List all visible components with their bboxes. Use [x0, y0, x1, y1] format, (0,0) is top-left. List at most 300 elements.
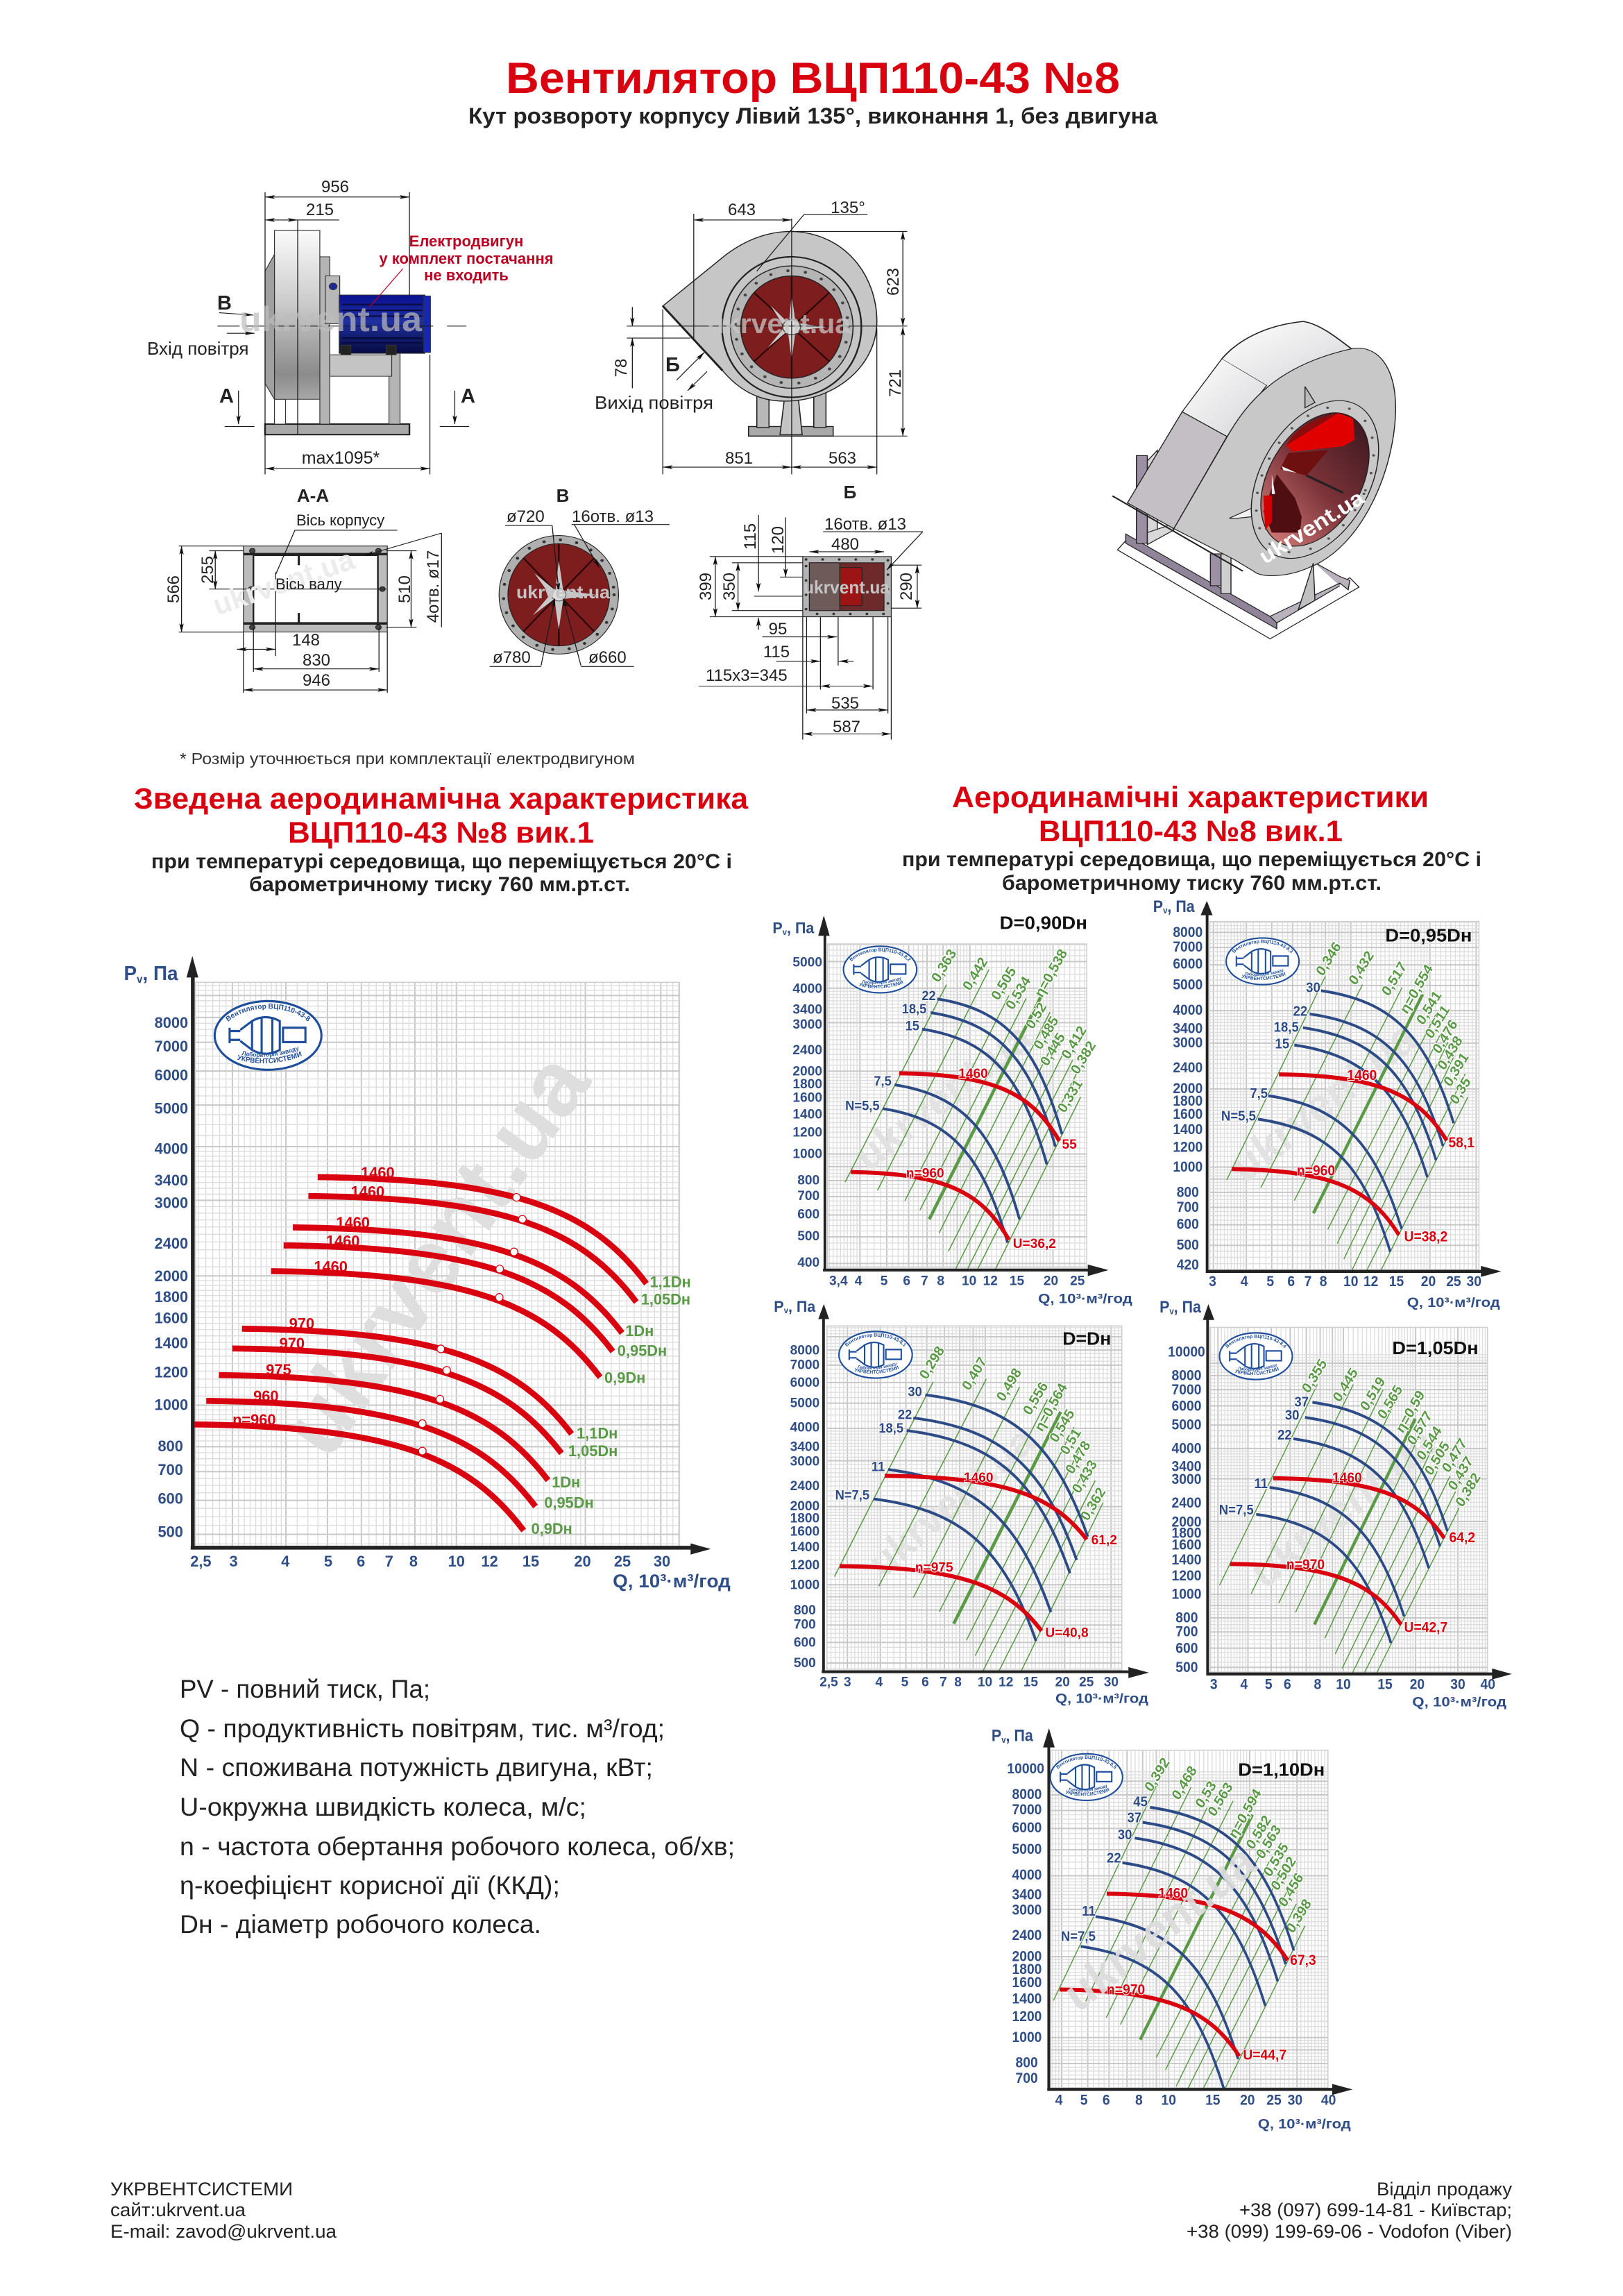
power curves	[1080, 1807, 1294, 2088]
power curves	[883, 999, 1062, 1242]
X axis labels: 15	[1010, 1273, 1024, 1289]
curve labels: 30	[1306, 980, 1320, 996]
efficiency labels: 0,534	[1003, 974, 1035, 1013]
efficiency labels: 0,52	[1023, 1000, 1050, 1032]
dimension text: section A-A: 148	[292, 631, 320, 650]
technical drawing: side view	[147, 178, 554, 474]
Y axis labels: 8000	[155, 1014, 188, 1031]
dimension text: front view: Б	[665, 354, 680, 376]
X axis labels: 4	[281, 1553, 290, 1570]
Y axis labels: 1400	[1172, 1552, 1201, 1568]
X axis labels: 2,5	[190, 1553, 212, 1570]
Y axis labels	[1007, 1761, 1044, 2086]
X axis labels: 25	[1446, 1274, 1461, 1290]
efficiency labels: 0,476	[1430, 1017, 1461, 1056]
power curves	[1258, 990, 1454, 1251]
stamp: Вентилятор ВЦП110-43-8,3	[1232, 940, 1293, 954]
efficiency labels: 0,346	[1314, 939, 1344, 979]
power curves	[1256, 1402, 1447, 1643]
Y axis labels: 1000	[1012, 2029, 1042, 2045]
watermark: ukrvent.ua	[1222, 1009, 1425, 1193]
speed labels: 1460	[326, 1232, 359, 1250]
Y axis labels	[790, 1342, 819, 1671]
X axis labels: 7	[1305, 1274, 1311, 1290]
watermark: ukrvent.ua	[239, 300, 423, 339]
axis titles: v	[137, 974, 143, 986]
efficiency labels: 0,445	[1330, 1365, 1361, 1405]
Y axis labels: 1600	[1012, 1975, 1042, 1991]
axis titles: P	[774, 1298, 784, 1315]
efficiency labels: 0,298	[917, 1344, 948, 1382]
X axis labels: 30	[1467, 1274, 1481, 1290]
Y axis labels	[792, 954, 822, 1270]
X axis labels: 2,5	[819, 1674, 838, 1690]
stamp	[1225, 937, 1300, 986]
Y axis labels: 3400	[1012, 1887, 1042, 1903]
Y axis labels: 1800	[1173, 1093, 1203, 1109]
Y axis labels: 5000	[1172, 1417, 1201, 1433]
axis titles: P	[992, 1727, 1001, 1745]
dimension text: side view: А	[461, 385, 475, 407]
Y axis labels: 6000	[1012, 1820, 1042, 1836]
icon: inlet wheel	[499, 536, 618, 654]
curve labels: 22	[921, 988, 936, 1003]
speed labels: 58,1	[1448, 1135, 1475, 1151]
Y axis labels: 2000	[1172, 1514, 1201, 1530]
subtitle: Кут розвороту корпусу Лівий 135°, виконання 1, без двигуна	[468, 103, 1157, 128]
stamp: Вентилятор ВЦП110-43-8,4	[1225, 1334, 1286, 1348]
axis titles: Q, 10³·м³/год	[613, 1571, 731, 1592]
diameter labels	[532, 1273, 691, 1537]
efficiency labels: 0,511	[1422, 1002, 1453, 1042]
curve labels	[845, 988, 936, 1113]
dimension text: side view: Вхід повітря	[147, 338, 249, 359]
X axis labels: 20	[1055, 1674, 1070, 1690]
legend: N - споживана потужність двигуна, кВт;	[180, 1753, 653, 1782]
axis titles	[992, 1727, 1351, 2132]
efficiency labels: 0,382	[1453, 1470, 1484, 1510]
efficiency labels: 0,362	[1078, 1485, 1109, 1523]
speed labels: 1460	[361, 1164, 395, 1181]
heading: characteristics	[902, 781, 1481, 895]
stamp: УКРВЕНТСИСТЕМИ	[237, 1051, 302, 1063]
Y axis labels: 8000	[1173, 925, 1203, 940]
dimension text: view Б: 480	[831, 535, 859, 554]
Y axis labels: 1000	[792, 1146, 822, 1162]
stamp: Лабораторія заводу	[1238, 1363, 1277, 1371]
dimension text: view Б: 587	[833, 718, 860, 736]
axis titles: , Па	[142, 963, 178, 984]
Y axis labels: 10000	[1168, 1344, 1205, 1360]
Y axis labels: 6000	[1173, 956, 1203, 972]
Y axis labels: 5000	[1173, 977, 1203, 993]
axis titles: , Па	[787, 919, 815, 937]
Y axis labels: 3400	[1173, 1021, 1203, 1037]
Y axis labels: 1200	[155, 1363, 188, 1381]
curve labels: N=7,5	[1061, 1929, 1096, 1945]
Y axis labels: 400	[797, 1255, 819, 1270]
Y axis labels: 1800	[1012, 1961, 1042, 1977]
X axis labels: 6	[921, 1674, 929, 1690]
Y axis labels: 5000	[792, 954, 822, 970]
X axis labels: 30	[1104, 1674, 1119, 1690]
curve labels	[835, 1384, 922, 1503]
Y axis labels: 700	[1175, 1624, 1198, 1640]
axes	[187, 956, 711, 1555]
X axis labels: 15	[1377, 1677, 1393, 1693]
stamp: УКРВЕНТСИСТЕМИ	[1066, 1788, 1110, 1796]
curve labels: 22	[898, 1407, 912, 1422]
stamp	[838, 1331, 913, 1379]
Y axis labels: 4000	[1172, 1441, 1201, 1457]
curve labels: 22	[1107, 1850, 1121, 1866]
efficiency labels	[1300, 1356, 1484, 1510]
grid	[827, 943, 1087, 1269]
footer: sales department	[1187, 2179, 1513, 2242]
diameter title: D=1,10Dн	[1238, 1759, 1325, 1780]
Y axis labels: 5000	[155, 1099, 188, 1117]
speed labels: 1460	[1347, 1067, 1377, 1083]
X axis labels: 40	[1481, 1677, 1495, 1693]
X axis labels: 15	[1205, 2093, 1221, 2109]
watermark: ukrvent.ua	[707, 309, 851, 339]
Y axis labels: 1400	[792, 1106, 822, 1122]
speed labels: 975	[266, 1361, 291, 1378]
chart: D=1,10Dн	[992, 1727, 1353, 2132]
curve labels: 37	[1294, 1394, 1309, 1410]
X axis labels	[1210, 1677, 1495, 1693]
efficiency labels: 0,382	[1068, 1038, 1099, 1077]
Y axis labels: 1800	[155, 1288, 188, 1306]
operating points	[418, 1194, 526, 1455]
stamp	[1050, 1753, 1123, 1801]
Y axis labels: 1800	[792, 1077, 822, 1092]
Y axis labels: 500	[794, 1655, 816, 1671]
efficiency labels: 0,544	[1414, 1424, 1445, 1463]
heading: characteristics: Аеродинамічні характеристики	[952, 781, 1429, 814]
stamp: Лабораторія заводу	[858, 1362, 897, 1370]
stamp	[842, 945, 917, 994]
X axis labels: 10	[978, 1674, 992, 1690]
curve labels: 11	[1082, 1903, 1096, 1919]
watermark: ukrvent.ua	[860, 1417, 1043, 1587]
X axis labels: 30	[1450, 1677, 1465, 1693]
curve labels: 37	[1127, 1810, 1141, 1826]
Y axis labels: 3000	[1173, 1035, 1203, 1051]
speed labels: n=970	[1107, 1982, 1145, 1998]
dimension text: view Б: 115х3=345	[706, 666, 788, 685]
diameter labels: 0,9Dн	[532, 1520, 572, 1537]
Y axis labels: 1400	[1173, 1122, 1203, 1138]
efficiency labels: 0,51	[1057, 1426, 1085, 1458]
dimension text: view B: ø660	[588, 648, 627, 667]
speed labels: 64,2	[1450, 1530, 1475, 1546]
icon: fan side view	[265, 230, 430, 434]
X axis labels: 6	[357, 1553, 365, 1570]
watermark: ukrvent.ua	[261, 1032, 609, 1474]
stamp: Вентилятор ВЦП110-43-8,2	[849, 948, 910, 962]
efficiency labels: 0,438	[1435, 1033, 1465, 1073]
diameter labels: 0,95Dн	[544, 1494, 594, 1511]
stamp: УКРВЕНТСИСТЕМИ	[859, 980, 903, 988]
legend: n - частота обертання робочого колеса, об/хв;	[180, 1832, 735, 1861]
diameter labels: 1,05Dн	[641, 1291, 690, 1308]
Y axis labels: 2400	[792, 1043, 822, 1058]
X axis labels: 8	[1135, 2093, 1143, 2109]
Y axis labels: 700	[794, 1617, 816, 1632]
grid	[1209, 920, 1479, 1270]
speed labels: n=960	[906, 1165, 944, 1181]
X axis labels: 5	[1266, 1274, 1274, 1290]
diameter labels: 0,9Dн	[604, 1369, 645, 1386]
efficiency labels: 0,391	[1441, 1050, 1472, 1090]
dimension text: view B: ø720	[507, 507, 545, 526]
axis titles: v	[1163, 906, 1168, 915]
X axis labels: 7	[940, 1674, 947, 1690]
X axis labels: 15	[522, 1553, 539, 1570]
Y axis labels: 3000	[155, 1194, 188, 1212]
footer: company contacts: сайт:ukrvent.ua	[110, 2200, 246, 2220]
Y axis labels: 1000	[790, 1577, 819, 1592]
Y axis labels: 1200	[1172, 1568, 1201, 1584]
dimension text: view B: 16отв. ø13	[572, 507, 654, 526]
Y axis labels: 800	[1175, 1610, 1198, 1626]
speed labels	[906, 1066, 1077, 1251]
dimension text: section A-A: 4отв. ø17	[424, 550, 443, 623]
dimension text: section A-A: А-А	[297, 485, 329, 506]
efficiency labels: 0,502	[1268, 1854, 1299, 1893]
Y axis labels: 1200	[792, 1124, 822, 1140]
power curves	[874, 1395, 1088, 1641]
Y axis labels: 4000	[1012, 1867, 1042, 1883]
arrows and dimension lines: front view	[627, 214, 908, 474]
curve labels: 11	[1255, 1476, 1268, 1492]
axes	[1200, 901, 1502, 1277]
dimension text: view Б: 290	[897, 573, 916, 600]
curve labels	[1219, 1394, 1309, 1518]
Y axis labels: 800	[1016, 2055, 1038, 2071]
footnote: * Розмір уточнюється при комплектації електродвигуном	[180, 750, 635, 768]
Y axis labels: 500	[158, 1523, 183, 1541]
arrows and dimension lines: side view	[217, 192, 469, 474]
curve labels: 30	[1285, 1407, 1300, 1424]
Y axis labels: 10000	[1007, 1761, 1044, 1777]
stamp: Вентилятор ВЦП110-43-8,5	[1056, 1755, 1117, 1769]
icon: outlet flange	[803, 557, 891, 617]
Y axis labels: 1400	[155, 1334, 188, 1351]
efficiency labels: 0,456	[1276, 1871, 1307, 1910]
X axis labels: 4	[876, 1674, 883, 1690]
efficiency labels: 0,519	[1358, 1374, 1388, 1414]
efficiency lines	[1227, 977, 1468, 1270]
title: Вентилятор ВЦП110-43 №8	[506, 54, 1120, 103]
diameter labels: 1,05Dн	[568, 1442, 618, 1460]
Y axis labels: 2400	[155, 1235, 188, 1252]
curve labels: N=5,5	[845, 1098, 880, 1113]
Y axis labels: 7000	[1172, 1382, 1201, 1398]
chart: D=1,05Dн	[1159, 1298, 1512, 1710]
dimension text: view Б: 399	[697, 573, 715, 600]
technical drawing: view Б (outlet)	[697, 482, 923, 740]
X axis labels	[819, 1674, 1119, 1690]
Y axis labels: 1600	[792, 1090, 822, 1106]
speed labels	[1286, 1470, 1475, 1636]
efficiency labels	[1142, 1755, 1314, 1936]
efficiency labels: 0,412	[1059, 1024, 1090, 1062]
Y axis labels: 4000	[155, 1140, 188, 1158]
legend: Dн - діаметр робочого колеса.	[180, 1910, 541, 1939]
X axis labels	[190, 1553, 670, 1570]
grid	[1209, 1327, 1488, 1673]
speed labels: 1460	[1332, 1470, 1362, 1486]
Y axis labels: 3000	[1172, 1471, 1201, 1487]
speed labels: n=970	[1286, 1557, 1325, 1573]
note: motor not included: Електродвигун	[409, 233, 523, 250]
efficiency labels: 0,541	[1414, 988, 1445, 1028]
X axis labels: 40	[1321, 2093, 1336, 2109]
X axis labels: 7	[921, 1273, 928, 1289]
watermark: ukrvent.ua	[1055, 1833, 1265, 2023]
dimension text: front view: 623	[884, 268, 903, 296]
curve labels: N=7,5	[835, 1487, 869, 1503]
icon: 3D fan illustration	[1112, 321, 1403, 639]
X axis labels: 8	[1320, 1274, 1327, 1290]
efficiency labels	[1314, 939, 1474, 1108]
dimension text: front view: 643	[728, 201, 756, 219]
axis titles: Q, 10³·м³/год	[1412, 1695, 1507, 1710]
footer: company contacts: УКРВЕНТСИСТЕМИ	[110, 2179, 293, 2200]
speed labels: n=960	[1297, 1163, 1335, 1179]
Y axis labels: 1800	[1172, 1526, 1201, 1542]
Y axis labels: 8000	[790, 1342, 819, 1358]
Y axis labels: 1600	[790, 1523, 819, 1539]
Y axis labels: 3000	[1012, 1902, 1042, 1918]
X axis labels: 5	[1265, 1677, 1273, 1693]
X axis labels: 6	[1284, 1677, 1291, 1693]
legend: Q - продуктивність повітрям, тис. м³/год;	[180, 1714, 665, 1743]
X axis labels: 20	[1410, 1677, 1425, 1693]
X axis labels: 20	[1240, 2093, 1255, 2109]
X axis labels: 12	[481, 1553, 498, 1570]
chart: summary aerodynamic characteristic	[124, 956, 731, 1592]
efficiency labels: 0,392	[1142, 1755, 1173, 1795]
efficiency labels: 0,468	[1169, 1764, 1200, 1803]
Y axis labels: 600	[1175, 1641, 1198, 1657]
dimension text: section A-A: 255	[198, 556, 217, 584]
axis titles	[774, 1298, 1148, 1705]
X axis labels: 15	[1023, 1674, 1038, 1690]
dimension text: view Б: 535	[831, 694, 859, 713]
dimension text: side view: 956	[321, 178, 349, 196]
curve labels: 22	[1293, 1003, 1307, 1020]
Y axis labels: 4000	[1173, 1002, 1203, 1018]
speed labels: 970	[289, 1315, 314, 1332]
axis titles	[1159, 1298, 1507, 1710]
grid	[194, 981, 680, 1546]
efficiency labels: 0,577	[1404, 1408, 1436, 1449]
speed labels: 1460	[314, 1258, 348, 1276]
curve labels: 30	[1118, 1827, 1132, 1843]
axis titles: Q, 10³·м³/год	[1407, 1295, 1500, 1310]
stamp: Лабораторія заводу	[862, 977, 901, 985]
Y axis labels: 2000	[1012, 1948, 1042, 1965]
efficiency labels: 0,535	[1261, 1840, 1292, 1880]
efficiency labels: 0,545	[1047, 1407, 1078, 1445]
diameter labels: 1,1Dн	[577, 1425, 618, 1442]
speed labels: 61,2	[1091, 1533, 1117, 1548]
X axis labels: 8	[937, 1273, 944, 1289]
diameter labels: 1,1Dн	[649, 1273, 691, 1290]
efficiency labels: 0,355	[1300, 1356, 1330, 1396]
dimension text: view B: В	[556, 485, 569, 506]
dimension lines: view Б	[699, 515, 923, 740]
speed labels	[1107, 1886, 1316, 2063]
X axis labels	[1055, 2093, 1336, 2109]
speed labels: n=975	[915, 1560, 953, 1576]
footer: sales department: Відділ продажу	[1377, 2179, 1513, 2200]
Y axis labels: 1200	[1012, 2009, 1042, 2025]
Y axis labels	[1173, 925, 1203, 1273]
efficiency labels: η=0,554	[1397, 961, 1436, 1017]
dimension text: view Б: 115	[741, 523, 760, 550]
axes	[818, 915, 1109, 1276]
Y axis labels: 2000	[792, 1063, 822, 1079]
speed curves	[851, 1073, 1060, 1240]
Y axis labels: 500	[797, 1229, 819, 1244]
Y axis labels: 700	[1177, 1199, 1199, 1215]
watermark: ukrvent.ua	[804, 577, 890, 598]
curve labels: 18,5	[878, 1421, 903, 1435]
Y axis labels: 3400	[790, 1439, 819, 1455]
speed labels: n=960	[232, 1411, 276, 1428]
dimension text: section A-A	[164, 485, 443, 690]
Y axis labels: 7000	[790, 1357, 819, 1373]
X axis labels: 10	[1162, 2093, 1176, 2109]
Y axis labels: 800	[797, 1172, 819, 1188]
dimension text: view B	[493, 485, 654, 667]
efficiency labels: 0,432	[1346, 948, 1377, 988]
diameter labels: 1Dн	[552, 1474, 580, 1491]
Y axis labels: 2400	[1173, 1060, 1203, 1076]
Y axis labels: 1200	[1173, 1140, 1203, 1156]
Y axis labels: 2000	[1173, 1081, 1203, 1097]
X axis labels: 3	[1209, 1274, 1216, 1290]
X axis labels: 10	[1343, 1274, 1358, 1290]
Y axis labels: 7000	[1173, 939, 1203, 955]
X axis labels: 8	[954, 1674, 962, 1690]
dimension text: front view: Вихід повітря	[595, 392, 713, 413]
efficiency labels: 0,331	[1055, 1077, 1086, 1115]
axis titles: , Па	[788, 1298, 816, 1315]
chart: D=0,95Dн	[1153, 897, 1502, 1310]
Y axis labels: 5000	[1012, 1841, 1042, 1857]
dimension text: view Б: 350	[720, 573, 739, 600]
heading: summary characteristic	[134, 782, 749, 896]
footer: sales department: +38 (099) 199-69-06 - Vodofon (Viber)	[1187, 2221, 1512, 2242]
curve labels: 7,5	[1250, 1086, 1268, 1101]
axes	[1043, 1728, 1352, 2095]
curve labels: 15	[1275, 1036, 1289, 1052]
efficiency lines	[1219, 1385, 1459, 1673]
curve labels: N=5,5	[1221, 1108, 1256, 1124]
X axis labels	[1209, 1274, 1481, 1290]
efficiency labels: 0,556	[1020, 1379, 1051, 1418]
icon: fan front view	[663, 231, 877, 436]
X axis labels: 6	[903, 1273, 910, 1289]
stamp: УКРВЕНТСИСТЕМИ	[1241, 972, 1286, 980]
Y axis labels: 3000	[790, 1453, 819, 1469]
curve labels: 18,5	[902, 1002, 926, 1016]
